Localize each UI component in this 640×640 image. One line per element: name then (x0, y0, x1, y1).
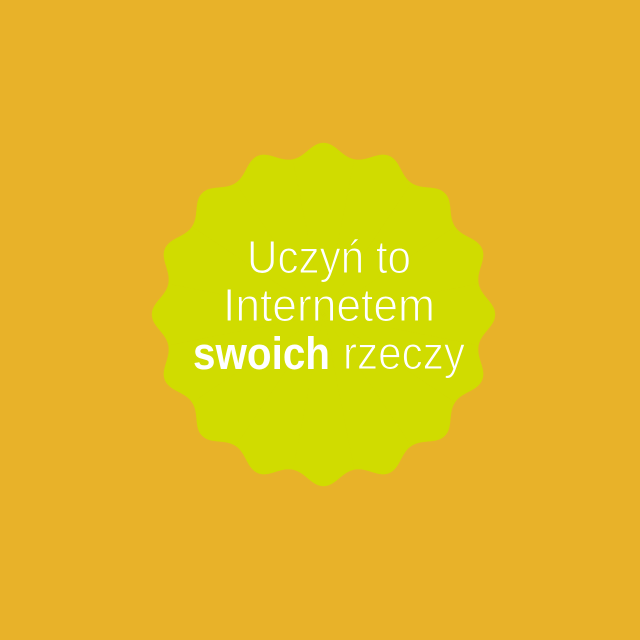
heading line 3: light word: rzeczy (343, 327, 465, 379)
heading (193, 231, 465, 379)
heading line 1: Uczyń to (247, 231, 411, 283)
badge: wavy lime seal (152, 143, 495, 486)
heading line 3: bold word: swoich (193, 328, 330, 379)
heading line 2: Internetem (223, 279, 435, 331)
